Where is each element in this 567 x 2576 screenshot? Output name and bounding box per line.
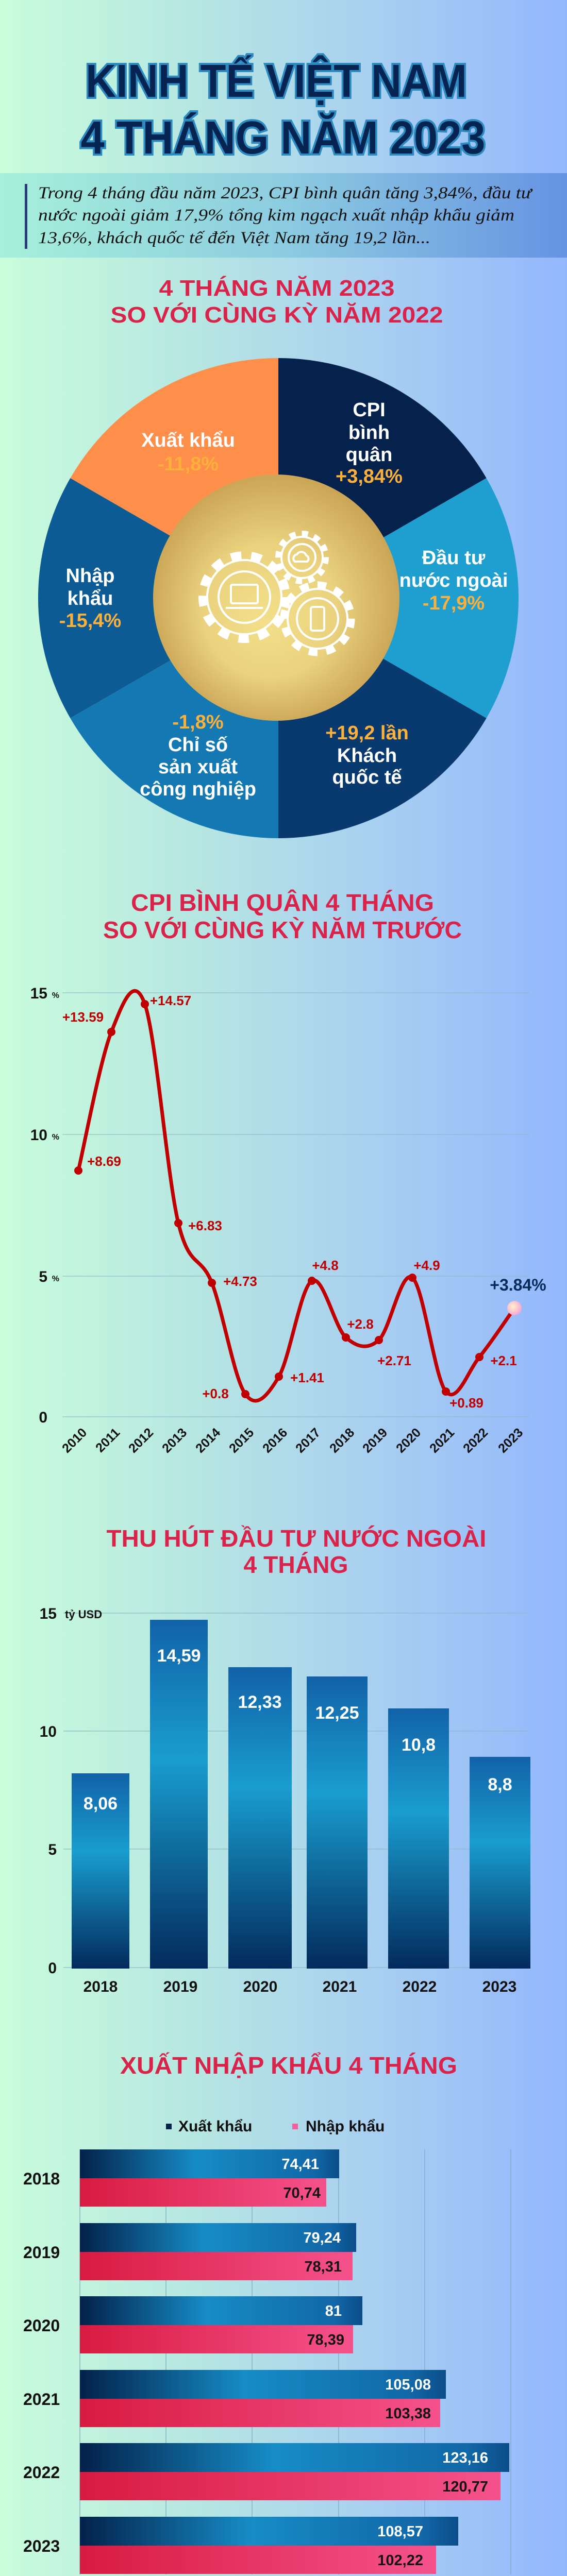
line chart: CPI: +0.89: [449, 1395, 483, 1411]
segment labels: Khách: [337, 745, 397, 767]
segment labels: sản xuất: [158, 756, 238, 778]
line chart: CPI: 2021: [427, 1425, 457, 1456]
line chart: CPI: +2.71: [377, 1353, 411, 1368]
segment labels: Nhập: [66, 565, 114, 587]
segment labels: công nghiệp: [140, 778, 256, 800]
bar chart: FDI: 12,33: [238, 1692, 282, 1712]
bar chart: trade: 78,31: [304, 2259, 342, 2275]
line chart: CPI: 2023: [495, 1425, 526, 1456]
legend: Nhập khẩu: [306, 2118, 385, 2135]
bar chart: FDI: 8,06: [84, 1794, 118, 1814]
line chart: CPI: +1.41: [290, 1370, 324, 1385]
segment labels: -15,4%: [59, 610, 121, 632]
intro text block: Trong 4 tháng đầu năm 2023, CPI bình quân tăng 3,84%, đầu tư: [38, 184, 533, 202]
title: KINH TẾ VIỆT NAM: [86, 55, 467, 107]
bar chart: trade: 2018: [23, 2170, 60, 2188]
line chart: CPI: 2014: [193, 1425, 223, 1456]
segment labels: +19,2 lần: [325, 722, 409, 744]
segment labels: +3,84%: [336, 466, 403, 487]
bar chart: trade: 102,22: [377, 2552, 423, 2569]
line chart: CPI: 2020: [393, 1425, 424, 1456]
bar chart: trade: 103,38: [385, 2405, 431, 2422]
bar chart: FDI: tỷ USD: [65, 1608, 102, 1621]
bar chart: trade: 79,24: [303, 2230, 341, 2246]
line chart: CPI: 2018: [327, 1425, 357, 1456]
intro text block: [0, 173, 567, 258]
segment labels: quốc tế: [332, 767, 402, 788]
legend: Xuất khẩu: [178, 2118, 252, 2135]
bar chart: FDI: 5: [48, 1841, 57, 1858]
heading: trade: XUẤT NHẬP KHẨU 4 THÁNG: [120, 2052, 457, 2079]
line chart: CPI: 2015: [226, 1425, 257, 1456]
heading: CPI: CPI BÌNH QUÂN 4 THÁNG: [131, 889, 434, 916]
line chart: CPI: 2016: [260, 1425, 290, 1456]
legend: [166, 2118, 385, 2135]
line chart: CPI: +13.59: [62, 1009, 104, 1025]
line chart: CPI: [30, 985, 546, 1456]
line chart: CPI: 5: [39, 1268, 47, 1285]
segment labels: -1,8%: [172, 711, 224, 733]
bar chart: FDI: [40, 1605, 530, 1995]
bar chart: trade: 2023: [23, 2537, 60, 2555]
heading: 4 thang nam 2023: 4 THÁNG NĂM 2023: [159, 275, 395, 301]
line chart: CPI: 0: [39, 1409, 47, 1426]
line chart: CPI: 15: [30, 985, 47, 1002]
bar chart: FDI: 14,59: [157, 1646, 201, 1666]
bar chart: trade: 70,74: [283, 2185, 321, 2201]
donut chart: [38, 358, 519, 838]
line chart: CPI: 2010: [59, 1425, 90, 1456]
segment labels: -11,8%: [158, 453, 219, 475]
bar chart: trade: 78,39: [307, 2332, 344, 2348]
line chart: CPI: %: [52, 1275, 59, 1283]
heading: FDI: [106, 1525, 487, 1578]
bar chart: FDI: 2018: [84, 1978, 118, 1995]
segment labels: khẩu: [68, 588, 113, 609]
bar chart: trade: 108,57: [377, 2523, 423, 2540]
bar chart: trade: 123,16: [442, 2450, 488, 2466]
bar chart: trade: [23, 2149, 529, 2576]
segment labels: nước ngoài: [399, 570, 508, 591]
heading: CPI: [103, 889, 462, 943]
line chart: CPI: %: [52, 991, 59, 1000]
bar chart: trade: 120,77: [442, 2479, 488, 2495]
heading: 4 thang nam 2023: SO VỚI CÙNG KỲ NĂM 2022: [110, 302, 443, 328]
line chart: CPI: 10: [30, 1127, 47, 1144]
segment labels: [59, 399, 508, 800]
bar chart: FDI: 2023: [482, 1978, 516, 1995]
bar chart: FDI: 12,25: [315, 1703, 359, 1723]
segment labels: Chỉ số: [168, 734, 228, 756]
heading: FDI: THU HÚT ĐẦU TƯ NƯỚC NGOÀI: [106, 1525, 487, 1552]
bar chart: trade: 2022: [23, 2463, 60, 2482]
line chart: CPI: 2017: [293, 1425, 323, 1456]
bar chart: trade: 2020: [23, 2316, 60, 2335]
segment labels: -17,9%: [423, 592, 485, 614]
line chart: CPI: %: [52, 1133, 59, 1142]
segment labels: Đầu tư: [422, 547, 486, 569]
line chart: CPI: 2019: [360, 1425, 390, 1456]
line chart: CPI: +6.83: [188, 1218, 222, 1233]
intro text block: 13,6%, khách quốc tế đến Việt Nam tăng 19,2 lần...: [38, 229, 430, 247]
segment labels: Xuất khẩu: [141, 430, 235, 451]
bar chart: trade: 2019: [23, 2243, 60, 2262]
line chart: CPI: +2.1: [490, 1353, 517, 1368]
icon: gears: [203, 534, 351, 652]
bar chart: FDI: 15: [40, 1605, 57, 1622]
segment labels: bình: [348, 422, 390, 444]
line chart: CPI: +4.8: [312, 1258, 339, 1273]
line chart: CPI: +4.9: [413, 1258, 440, 1273]
line chart: CPI: +0.8: [202, 1386, 229, 1401]
bar chart: FDI: 2022: [403, 1978, 437, 1995]
line chart: CPI: +8.69: [87, 1154, 121, 1169]
intro text block: nước ngoài giảm 17,9% tổng kim ngạch xuất nhập khẩu giảm: [38, 206, 514, 225]
line chart: CPI: +3.84%: [490, 1276, 546, 1294]
heading: 4 thang nam 2023: [110, 275, 443, 328]
heading: FDI: 4 THÁNG: [243, 1551, 348, 1578]
line chart: CPI: +2.8: [347, 1316, 374, 1332]
heading: CPI: SO VỚI CÙNG KỲ NĂM TRƯỚC: [103, 917, 462, 943]
line chart: CPI: 2012: [126, 1425, 156, 1456]
bar chart: trade: 81: [325, 2303, 342, 2319]
segment labels: quân: [346, 444, 392, 466]
line chart: CPI: 2022: [460, 1425, 491, 1456]
bar chart: trade: 74,41: [281, 2156, 319, 2173]
bar chart: FDI: 2021: [323, 1978, 357, 1995]
bar chart: FDI: 2019: [163, 1978, 197, 1995]
line chart: CPI: +4.73: [223, 1274, 257, 1289]
bar chart: FDI: 0: [48, 1960, 57, 1977]
segment labels: CPI: [353, 399, 386, 421]
line chart: CPI: +14.57: [150, 993, 191, 1008]
title: [80, 55, 486, 164]
bar chart: trade: 105,08: [385, 2377, 431, 2393]
line chart: CPI: 2013: [159, 1425, 190, 1456]
bar chart: trade: 2021: [23, 2390, 60, 2409]
bar chart: FDI: 2020: [243, 1978, 277, 1995]
bar chart: FDI: 8,8: [488, 1775, 512, 1794]
bar chart: FDI: 10,8: [402, 1735, 436, 1755]
line chart: CPI: 2011: [93, 1425, 123, 1455]
title: 4 THÁNG NĂM 2023: [80, 112, 486, 164]
center gold circle: [153, 474, 399, 721]
bar chart: FDI: 10: [40, 1723, 57, 1740]
